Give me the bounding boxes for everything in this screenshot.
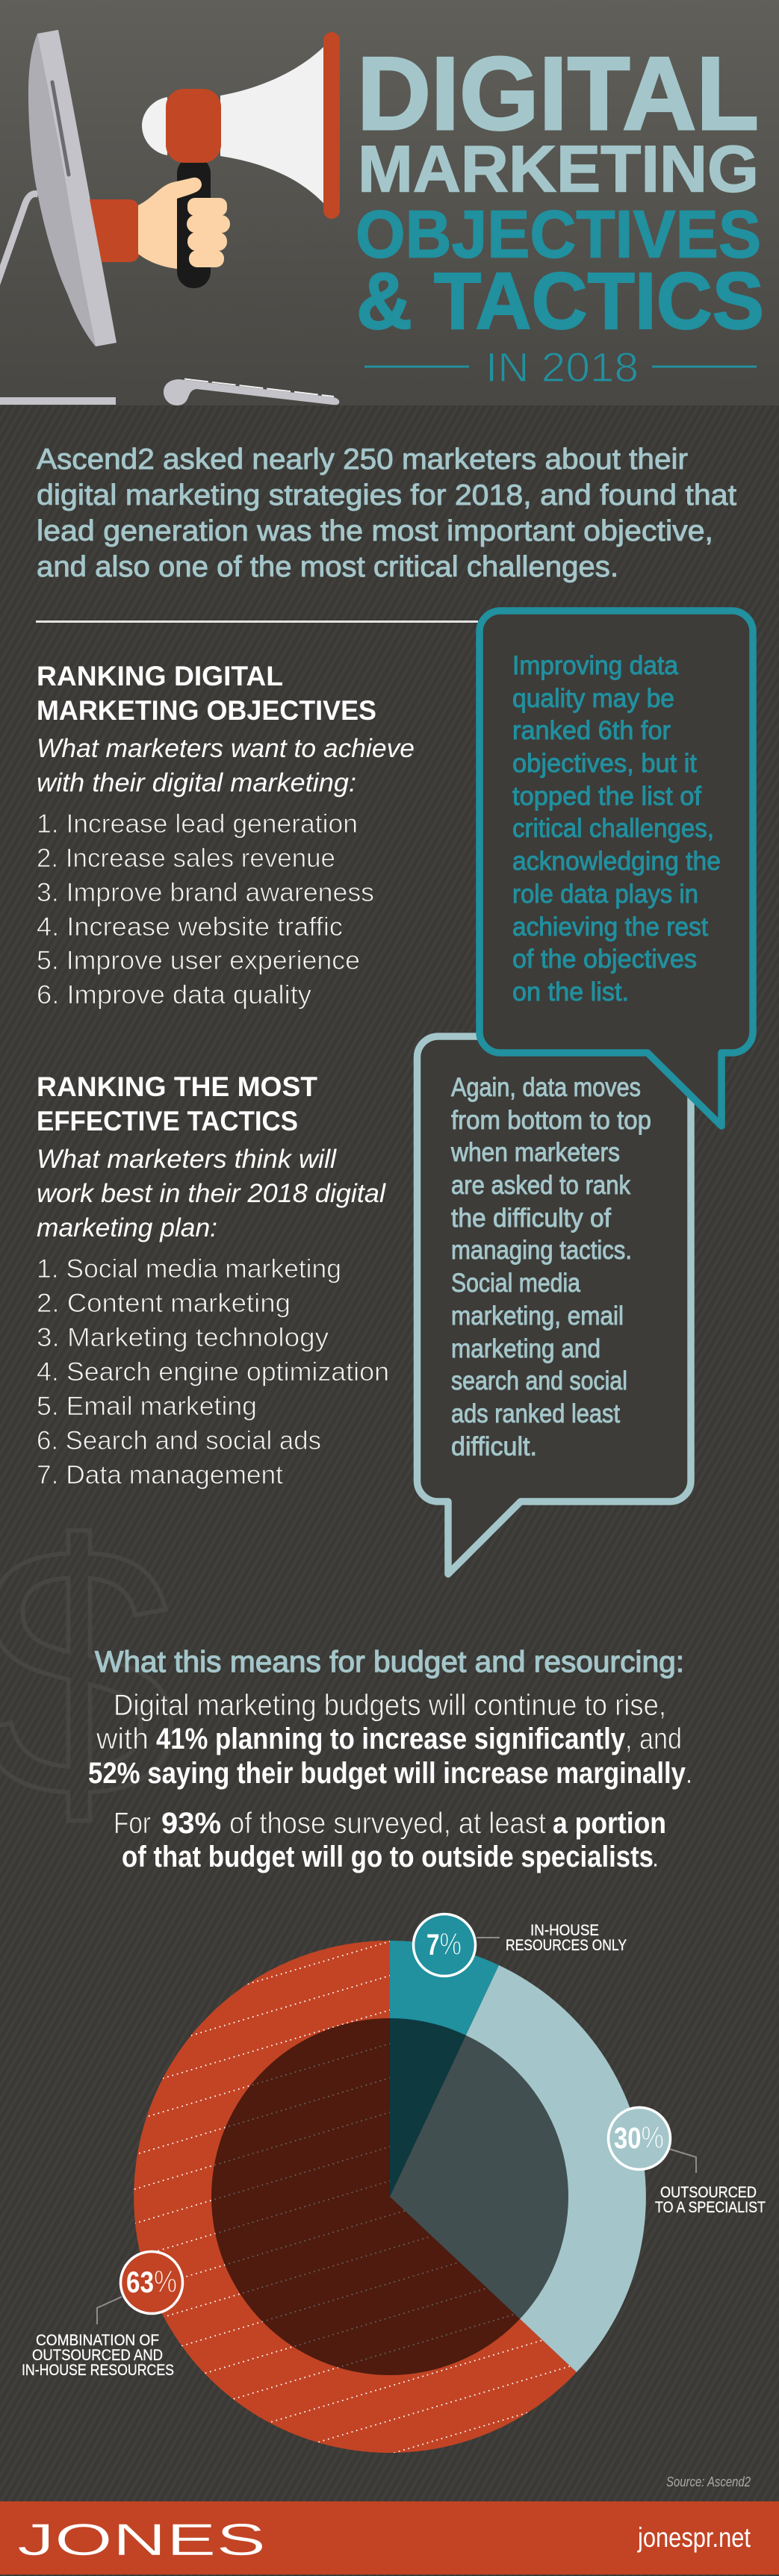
- logo: jones: JONES: [17, 2515, 266, 2565]
- panel: ranking objectives: [37, 661, 415, 1009]
- list: objectives: 4. Increase website traffic: [37, 912, 343, 942]
- text: bubble one: acknowledging the: [512, 847, 721, 876]
- list: tactics: 5. Email marketing: [37, 1391, 257, 1421]
- callout: 7% in-house resources only: RESOURCES ONLY: [506, 1937, 627, 1954]
- text: bubble two: ads ranked least: [451, 1399, 620, 1428]
- intro paragraph: Ascend2 asked nearly 250 marketers about their: [37, 444, 688, 476]
- text: outside specialists: For: [114, 1807, 151, 1840]
- text: outside specialists: .: [651, 1841, 659, 1873]
- title: DIGITAL: [357, 36, 759, 152]
- text: budgets rising: 52% saying their budget will increase marginally: [88, 1757, 686, 1790]
- slice: 7% in-house: [390, 1941, 499, 2197]
- text: bubble two: difficult.: [451, 1432, 537, 1461]
- text: bubble two: marketing and: [451, 1334, 600, 1363]
- text: budgets rising: with: [96, 1723, 149, 1755]
- heading: ranking digital marketing objectives: RANKING DIGITAL: [37, 661, 283, 691]
- text: bubble two: are asked to rank: [451, 1171, 630, 1200]
- speech bubble: improving data quality: [479, 611, 753, 1126]
- subheading: objectives: What marketers want to achieve: [37, 734, 415, 763]
- list: tactics: 2. Content marketing: [37, 1288, 291, 1318]
- callout: 63% combination: COMBINATION OF: [36, 2332, 159, 2349]
- icon: computer monitor with stand and keyboard: [0, 30, 339, 405]
- text: bubble two: marketing, email: [451, 1301, 624, 1331]
- panel: ranking tactics: [37, 1071, 389, 1490]
- text: bubble one: topped the list of: [512, 782, 701, 811]
- text: budgets rising: , and: [625, 1723, 682, 1755]
- chart: resourcing donut: [22, 1913, 766, 2453]
- text: bubble one: [512, 651, 721, 1007]
- heading: ranking the most effective tactics: EFFECTIVE TACTICS: [37, 1106, 298, 1136]
- slice: 63% combination: [134, 1941, 577, 2453]
- speech bubble: data moves from bottom to top: [417, 1036, 691, 1574]
- subheading: tactics: marketing plan:: [37, 1213, 217, 1242]
- intro paragraph: lead generation was the most important objective,: [37, 515, 713, 547]
- list: objectives: 1. Increase lead generation: [37, 809, 358, 839]
- list: tactics: [37, 1254, 389, 1490]
- callout: 30% outsourced to a specialist: [608, 2107, 766, 2216]
- text: bubble two: managing tactics.: [451, 1236, 632, 1265]
- header banner: [0, 0, 779, 405]
- text: budgets rising: Digital marketing budgets will continue to rise,: [114, 1689, 666, 1722]
- subheading: tactics: [37, 1145, 386, 1242]
- icon: hand holding megaphone: [90, 32, 340, 288]
- text: bubble one: Improving data: [512, 651, 678, 680]
- list: tactics: 1. Social media marketing: [37, 1254, 341, 1284]
- text: bubble one: objectives, but it: [512, 749, 697, 778]
- footer band: [0, 2501, 779, 2575]
- heading: ranking the most effective tactics: RANKING THE MOST: [37, 1071, 317, 1102]
- text: bubble two: from bottom to top: [451, 1106, 651, 1135]
- callout: 30% outsourced to a specialist: OUTSOURCED: [660, 2184, 757, 2201]
- text: bubble two: search and social: [451, 1366, 627, 1396]
- text: bubble one: critical challenges,: [512, 814, 714, 843]
- subheading: objectives: [37, 734, 415, 797]
- text: budgets rising: 41% planning to increase significantly: [156, 1723, 626, 1755]
- panel: budget and resourcing: [88, 1646, 693, 1873]
- list: tactics: 7. Data management: [37, 1460, 283, 1490]
- text: outside specialists: a portion: [553, 1807, 666, 1840]
- callout: 63% combination: [22, 2252, 182, 2379]
- inner dark circle: [211, 2018, 568, 2375]
- heading: ranking digital marketing objectives: [37, 661, 376, 726]
- list: tactics: 6. Search and social ads: [37, 1425, 321, 1455]
- source note: Source: Ascend2: [666, 2474, 751, 2489]
- text: bubble two: the difficulty of: [451, 1204, 611, 1233]
- text: bubble two: [450, 1073, 651, 1461]
- text: bubble one: ranked 6th for: [512, 716, 671, 745]
- text: bubble one: quality may be: [512, 684, 674, 713]
- text: bubble one: role data plays in: [512, 880, 698, 909]
- list: tactics: 3. Marketing technology: [37, 1322, 329, 1352]
- list: tactics: 4. Search engine optimization: [37, 1357, 389, 1387]
- title: MARKETING: [358, 131, 759, 206]
- text: bubble two: Social media: [451, 1269, 580, 1298]
- subheading: objectives: with their digital marketing:: [37, 768, 356, 797]
- list: objectives: [37, 809, 374, 1009]
- list: objectives: 6. Improve data quality: [37, 980, 311, 1009]
- heading: ranking digital marketing objectives: MARKETING OBJECTIVES: [37, 695, 376, 726]
- intro paragraph: and also one of the most critical challenges.: [37, 551, 618, 583]
- text: budgets rising: .: [685, 1757, 693, 1790]
- footer url: jonespr.net: [637, 2522, 751, 2553]
- list: objectives: 3. Improve brand awareness: [37, 877, 374, 907]
- subheading: tactics: work best in their 2018 digital: [37, 1179, 386, 1208]
- text: outside specialists: of those surveyed, at least: [229, 1807, 546, 1840]
- heading: what this means for budget: What this means for budget and resourcing:: [95, 1646, 684, 1679]
- callout: 30% outsourced to a specialist: 30%: [614, 2120, 664, 2155]
- intro paragraph: [37, 444, 736, 583]
- text: bubble two: Again, data moves: [451, 1073, 641, 1102]
- callout: 63% combination: OUTSOURCED AND: [32, 2347, 163, 2364]
- callout: 7% in-house resources only: 7%: [426, 1926, 462, 1961]
- text: bubble two: when marketers: [450, 1138, 620, 1167]
- subtitle: in 2018: IN 2018: [485, 343, 639, 391]
- subheading: tactics: What marketers think will: [37, 1145, 337, 1174]
- callout: 63% combination: 63%: [126, 2264, 177, 2299]
- title: [356, 36, 764, 346]
- callout: 7% in-house resources only: IN-HOUSE: [530, 1922, 599, 1939]
- text: bubble one: achieving the rest: [512, 912, 708, 942]
- list: objectives: 2. Increase sales revenue: [37, 843, 335, 873]
- text: outside specialists: of that budget will go to outside specialists: [122, 1841, 654, 1873]
- text: bubble one: on the list.: [512, 977, 629, 1007]
- text: outside specialists: [114, 1807, 666, 1873]
- title: & TACTICS: [356, 255, 764, 346]
- intro paragraph: digital marketing strategies for 2018, and found that: [37, 479, 736, 511]
- list: objectives: 5. Improve user experience: [37, 945, 360, 975]
- heading: ranking the most effective tactics: [37, 1071, 317, 1136]
- text: bubble one: of the objectives: [512, 945, 697, 974]
- slice: 30% outsourced: [390, 1965, 646, 2372]
- text: budgets rising: [88, 1689, 693, 1790]
- text: outside specialists: 93%: [161, 1807, 221, 1840]
- callout: 7% in-house resources only: [414, 1914, 627, 1976]
- callout: 63% combination: IN-HOUSE RESOURCES: [22, 2362, 174, 2379]
- title: OBJECTIVES: [356, 197, 761, 272]
